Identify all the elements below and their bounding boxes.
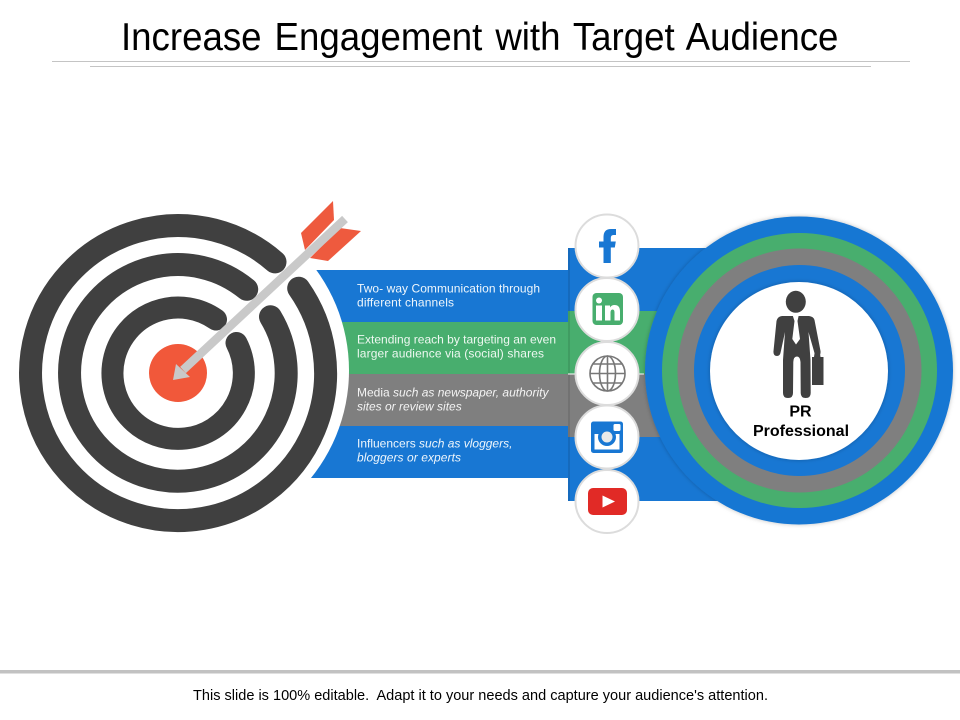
panel: message bands xyxy=(290,270,568,478)
connector: green xyxy=(568,311,718,374)
band: media xyxy=(290,374,568,426)
ring: grey xyxy=(678,248,922,492)
band text: two-way: Two- way Communication through xyxy=(357,282,540,296)
band text: extending reach: Extending reach by targeting an even xyxy=(357,332,556,346)
band text: influencers: such as vloggers, xyxy=(419,436,512,450)
briefcase xyxy=(812,354,824,385)
icon: youtube xyxy=(576,470,638,533)
arrow fletching xyxy=(301,201,361,261)
panel: audience rings xyxy=(645,216,953,524)
footer text: This slide is 100% editable. Adapt it to your needs and capture your audience's attention. xyxy=(193,687,768,704)
bullseye xyxy=(149,344,207,402)
band text: media: such as newspaper, authority xyxy=(393,386,549,400)
icon: instagram xyxy=(576,406,638,468)
band: influencers xyxy=(290,426,568,478)
tie xyxy=(792,316,800,344)
icon: globe xyxy=(576,342,638,405)
band text: influencers: Influencers xyxy=(357,436,419,450)
label: PR Professional: Professional xyxy=(753,423,849,440)
ring: outer blue xyxy=(645,216,953,524)
panel: target white backing xyxy=(7,200,349,542)
center white disc xyxy=(710,282,888,460)
band text: two-way: different channels xyxy=(357,296,454,310)
band text: influencers: bloggers or experts xyxy=(357,450,461,464)
ring: inner blue xyxy=(694,265,905,476)
band text: media: Media xyxy=(357,386,393,400)
title: Increase Engagement with Target Audience xyxy=(121,16,838,59)
footer rule xyxy=(0,670,960,674)
icon: arrow xyxy=(173,201,361,380)
icon: facebook xyxy=(576,214,638,278)
arrow shaft xyxy=(183,219,345,370)
connector: grey xyxy=(568,374,718,437)
body xyxy=(773,316,821,398)
band: extending reach xyxy=(290,322,568,374)
band: two-way communication xyxy=(290,270,568,322)
arrow head xyxy=(173,364,190,380)
connector: blue top xyxy=(568,248,718,311)
band text: extending reach: larger audience via (social) shares xyxy=(357,346,544,360)
label: PR Professional: PR xyxy=(789,404,812,420)
icon: businessman xyxy=(773,291,824,398)
head xyxy=(786,291,806,313)
connector: blue bottom xyxy=(568,437,718,501)
target icon xyxy=(31,226,326,521)
band text: media: sites or review sites xyxy=(357,400,462,414)
icon: linkedin xyxy=(576,278,638,341)
ring: green xyxy=(662,233,937,508)
panel: connector block xyxy=(568,248,718,501)
